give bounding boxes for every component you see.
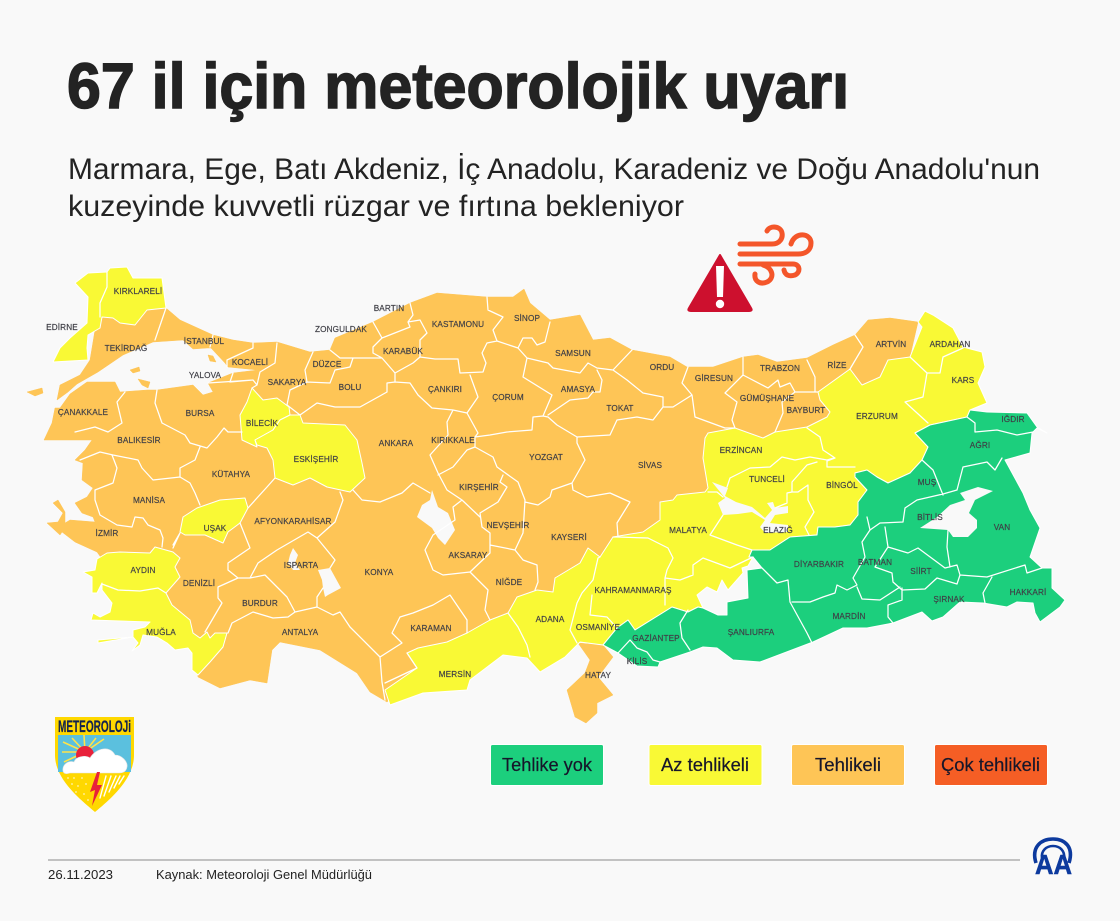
legend item: no danger: [490, 744, 604, 786]
legend item: no danger: Tehlike yok: [502, 755, 593, 775]
province labels: VAN: [994, 523, 1010, 532]
province labels: SİNOP: [514, 313, 540, 323]
logo: Meteoroloji shield: METEOROLOJi: [58, 717, 131, 736]
province labels: BALIKESİR: [117, 435, 161, 445]
date: 26.11.2023: [48, 868, 113, 882]
region: yellow provinces: [53, 267, 987, 705]
province labels: TEKİRDAĞ: [105, 343, 147, 353]
province labels: TUNCELİ: [749, 474, 785, 484]
province labels: ŞIRNAK: [933, 595, 965, 604]
province labels: KAYSERİ: [551, 532, 587, 542]
province labels: ELAZIĞ: [763, 525, 793, 535]
legend item: danger: [792, 744, 904, 786]
province labels: NEVŞEHİR: [487, 520, 529, 530]
province labels: BAYBURT: [787, 406, 825, 415]
province labels: ANKARA: [379, 439, 414, 448]
province labels: BİLECİK: [246, 418, 279, 428]
lakes: [288, 482, 993, 597]
province labels: KOCAELİ: [232, 357, 268, 367]
province labels: KÜTAHYA: [212, 469, 251, 479]
province labels: AMASYA: [561, 385, 596, 394]
province labels: YOZGAT: [529, 453, 563, 462]
province labels: DENİZLİ: [183, 578, 215, 588]
province labels: MANİSA: [133, 495, 165, 505]
province labels: ARTVİN: [876, 339, 906, 349]
province labels: KONYA: [365, 568, 394, 577]
province labels: AĞRI: [970, 440, 990, 450]
province labels: YALOVA: [189, 371, 222, 380]
legend item: danger: Tehlikeli: [815, 755, 881, 775]
region: orange provinces: [27, 289, 918, 723]
province labels: AKSARAY: [449, 551, 488, 560]
province labels: MUŞ: [918, 478, 937, 487]
legend item: low danger: Az tehlikeli: [661, 755, 749, 775]
legend item: low danger: [649, 744, 762, 786]
province labels: GİRESUN: [695, 373, 733, 383]
province labels: OSMANİYE: [576, 622, 621, 632]
title: 67 il için meteorolojik uyarı: [67, 50, 849, 122]
map of Turkey: [27, 267, 1065, 723]
province labels: ARDAHAN: [930, 340, 970, 349]
province labels: KARABÜK: [383, 346, 423, 356]
province labels: ESKİŞEHİR: [294, 454, 338, 464]
province labels: KASTAMONU: [432, 320, 484, 329]
province borders: [75, 272, 1042, 700]
province labels: BOLU: [339, 383, 361, 392]
province labels: AYDIN: [130, 566, 156, 575]
province labels: ORDU: [650, 363, 674, 372]
province labels: SİİRT: [910, 566, 932, 576]
province labels: İZMİR: [96, 528, 118, 538]
province labels: KARAMAN: [410, 624, 452, 633]
province labels: ANTALYA: [282, 628, 319, 637]
subtitle: [68, 153, 1040, 223]
province labels: İSTANBUL: [184, 336, 225, 346]
province labels: TRABZON: [760, 364, 800, 373]
province labels: UŞAK: [204, 524, 227, 533]
province labels: AFYONKARAHİSAR: [254, 516, 332, 526]
province labels: ÇANKIRI: [428, 385, 462, 394]
province labels: BİNGÖL: [826, 480, 858, 490]
province labels: MERSİN: [439, 669, 471, 679]
subtitle: Marmara, Ege, Batı Akdeniz, İç Anadolu, Karadeniz ve Doğu Anadolu'nun: [68, 153, 1040, 186]
province labels: HAKKARİ: [1010, 587, 1046, 597]
source: Kaynak: Meteoroloji Genel Müdürlüğü: [156, 868, 372, 882]
province labels: KAHRAMANMARAŞ: [594, 586, 672, 595]
province labels: KIRIKKALE: [431, 436, 475, 445]
footer rule: [48, 859, 1020, 861]
province labels: HATAY: [585, 671, 611, 680]
province labels: SİVAS: [638, 460, 662, 470]
province labels: ISPARTA: [284, 561, 319, 570]
province labels: KIRŞEHİR: [459, 482, 499, 492]
province labels: IĞDIR: [1001, 414, 1025, 424]
subtitle: kuzeyinde kuvvetli rüzgar ve fırtına bekleniyor: [68, 190, 684, 223]
province labels: NİĞDE: [496, 577, 523, 587]
province labels: KİLİS: [627, 656, 648, 666]
province labels: KIRKLARELİ: [114, 286, 162, 296]
province labels: BURDUR: [242, 599, 278, 608]
province labels: MUĞLA: [146, 627, 176, 637]
province labels: BATMAN: [858, 558, 892, 567]
province labels: EDİRNE: [46, 322, 78, 332]
province labels: BARTIN: [374, 304, 404, 313]
province labels: ERZİNCAN: [720, 445, 762, 455]
province labels: GAZİANTEP: [632, 633, 680, 643]
province labels: ÇANAKKALE: [58, 408, 109, 417]
icon: warning triangle: [688, 255, 752, 311]
province labels: KARS: [952, 376, 975, 385]
province labels: ADANA: [536, 615, 565, 624]
province labels: SAMSUN: [555, 349, 591, 358]
icon: wind: [740, 227, 811, 283]
province labels: SAKARYA: [268, 378, 307, 387]
province labels: DÜZCE: [313, 359, 342, 369]
province labels: MARDİN: [832, 611, 866, 621]
province labels: RİZE: [827, 360, 847, 370]
legend item: high danger: Çok tehlikeli: [941, 755, 1040, 775]
legend: [490, 744, 1048, 786]
region: green provinces: [603, 410, 1065, 667]
legend item: high danger: [934, 744, 1048, 786]
province labels: ÇORUM: [492, 393, 524, 402]
province labels: ŞANLIURFA: [728, 628, 775, 637]
province labels: ERZURUM: [856, 412, 898, 421]
province labels: DİYARBAKIR: [794, 559, 844, 569]
province labels: BURSA: [186, 409, 215, 418]
province labels: ZONGULDAK: [315, 325, 367, 334]
logo: AA: AA: [1035, 849, 1072, 880]
province labels: BİTLİS: [917, 512, 943, 522]
province labels: [46, 286, 1046, 680]
province labels: MALATYA: [669, 526, 707, 535]
province labels: TOKAT: [606, 404, 634, 413]
logo: Meteoroloji shield: [55, 717, 134, 812]
province labels: GÜMÜŞHANE: [740, 393, 795, 403]
